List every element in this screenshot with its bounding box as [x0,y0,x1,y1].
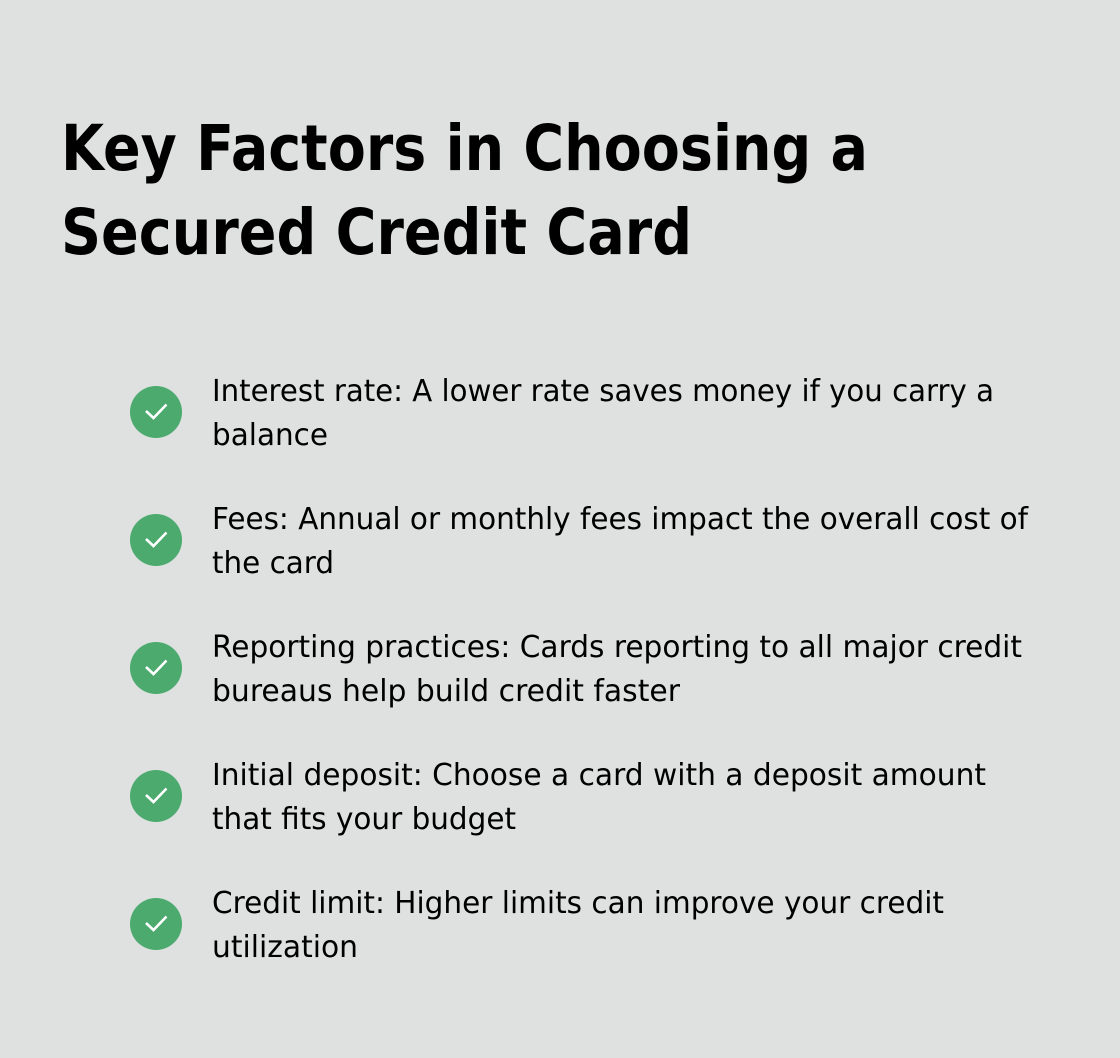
title [61,112,868,269]
text: reporting practices [212,630,1022,709]
text: reporting practices: bureaus help build credit faster [212,674,681,709]
item: initial deposit [130,758,986,837]
text: credit limit: utilization [212,930,358,965]
icon: check circle [130,770,182,822]
text: interest rate: balance [212,418,328,453]
item: reporting practices [130,630,1022,709]
icon: check circle [130,386,182,438]
item: interest rate [130,374,994,453]
title: Key Factors in Choosing a [61,112,868,185]
text: credit limit: Credit limit: Higher limits can improve your credit [212,886,944,921]
icon: check circle [130,514,182,566]
title: Secured Credit Card [61,196,692,269]
item: fees [130,502,1029,581]
text: interest rate [212,374,994,453]
text: initial deposit [212,758,986,837]
checklist [130,374,1029,965]
text: initial deposit: that fits your budget [212,802,516,837]
text: fees [212,502,1029,581]
text: credit limit [212,886,944,965]
item: credit limit [130,886,944,965]
icon: check circle [130,642,182,694]
text: fees: the card [212,546,334,581]
text: initial deposit: Initial deposit: Choose a card with a deposit amount [212,758,986,793]
text: fees: Fees: Annual or monthly fees impact the overall cost of [212,502,1029,537]
text: reporting practices: Reporting practices: Cards reporting to all major credit [212,630,1022,665]
text: interest rate: Interest rate: A lower rate saves money if you carry a [212,374,994,409]
icon: check circle [130,898,182,950]
